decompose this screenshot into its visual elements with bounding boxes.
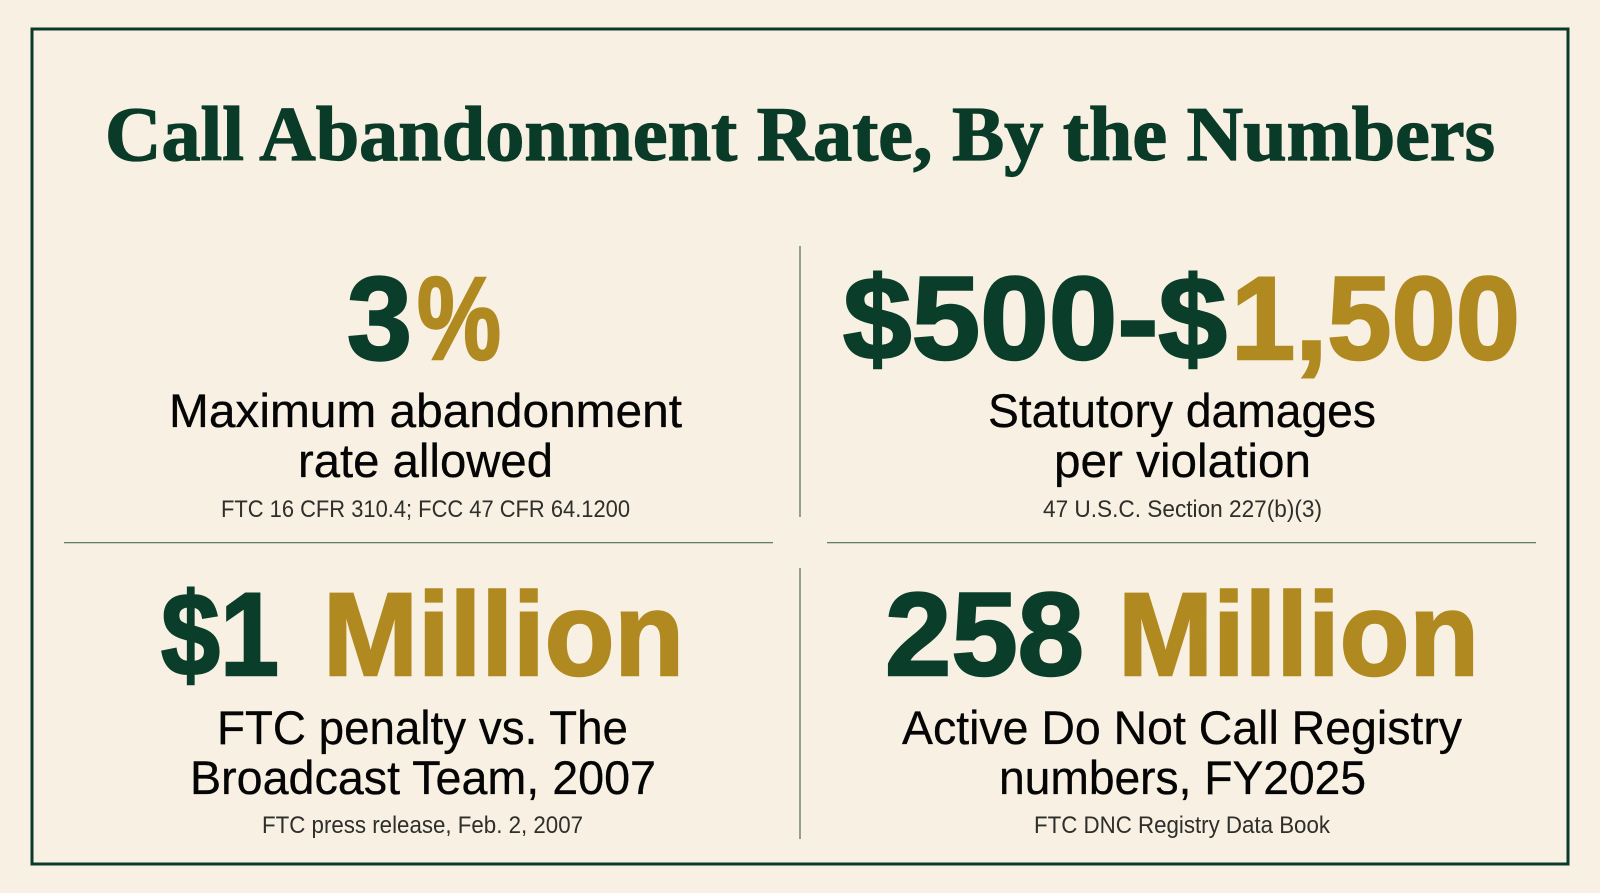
panel: maximum abandonment rate (169, 253, 682, 523)
source: 47 U.S.C.: 47 U.S.C. Section 227(b)(3) (1043, 496, 1322, 523)
label: FTC penalty vs. The Broadcast Team, 2007 (190, 701, 656, 804)
stat: $500-$1,500: 1,500 (1231, 253, 1520, 385)
label: statutory damages per violation (988, 384, 1376, 487)
label: FTC penalty vs. The Broadcast Team, 2007: FTC penalty vs. The (217, 701, 628, 754)
title: Call Abandonment Rate, By the Numbers (105, 91, 1495, 177)
source: FTC press release: FTC press release, Feb. 2, 2007 (262, 812, 583, 839)
panel: FTC penalty (161, 569, 684, 839)
stat: $500-$1,500: $500-$ (843, 253, 1227, 385)
stat: $500-$1,500 (843, 253, 1520, 385)
label: active Do Not Call Registry numbers: numbers, FY2025 (999, 751, 1366, 804)
label: active Do Not Call Registry numbers: Active Do Not Call Registry (902, 701, 1462, 754)
stat: 3%: % (417, 253, 501, 385)
stat: $1 Million: $1 (161, 569, 279, 701)
label: active Do Not Call Registry numbers (902, 701, 1462, 804)
label: maximum abandonment rate allowed: rate allowed (298, 434, 553, 487)
stat: 258 Million: Million (1118, 569, 1479, 701)
label: statutory damages per violation: per violation (1054, 434, 1311, 487)
label: maximum abandonment rate allowed: Maximum abandonment (169, 384, 682, 437)
stat: 3%: 3 (347, 253, 412, 385)
label: FTC penalty vs. The Broadcast Team, 2007: Broadcast Team, 2007 (190, 751, 656, 804)
panel: Do Not Call Registry (885, 569, 1479, 839)
stat: 3% (347, 253, 501, 385)
stat: $1 Million (161, 569, 684, 701)
panel: statutory damages (843, 253, 1520, 523)
label: maximum abandonment rate allowed (169, 384, 682, 487)
label: statutory damages per violation: Statutory damages (988, 384, 1376, 437)
stat: 258 Million: 258 (885, 569, 1084, 701)
stat: 258 Million (885, 569, 1479, 701)
source: FTC and FCC rules: FTC 16 CFR 310.4; FCC 47 CFR 64.1200 (221, 496, 630, 523)
stat: $1 Million: Million (323, 569, 684, 701)
source: FTC DNC Registry Data Book: FTC DNC Registry Data Book (1034, 812, 1331, 839)
